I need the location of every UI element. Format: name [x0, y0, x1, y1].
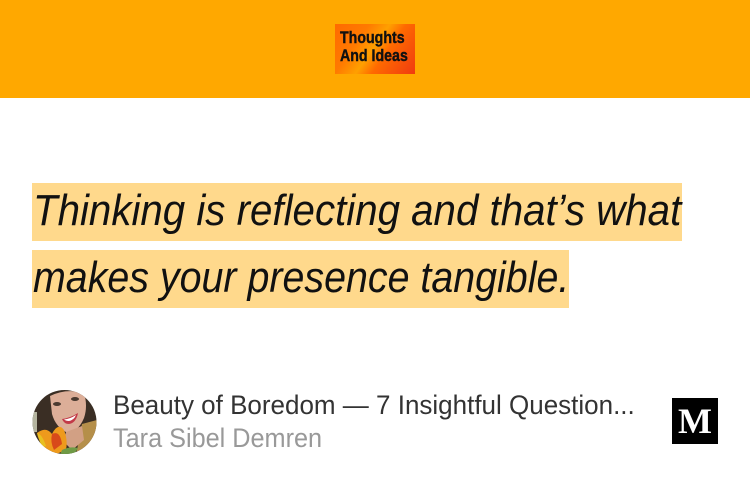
quote text line 1: Thinking is reflecting and that’s what [33, 186, 681, 235]
article title: Beauty of Boredom — 7 Insightful Question... [113, 390, 635, 420]
logo: Thoughts And Ideas [335, 24, 415, 74]
quote highlight line 2 [32, 250, 569, 308]
quote text line 2: makes your presence tangible. [33, 253, 569, 302]
header band [0, 0, 750, 98]
quote highlight line 1 [32, 183, 682, 241]
avatar [32, 390, 96, 454]
icon: Medium logo: M [678, 401, 712, 441]
author name: Tara Sibel Demren [113, 423, 322, 453]
logo: Thoughts And Ideas: And Ideas [340, 46, 408, 65]
quote [32, 183, 683, 308]
icon: Medium logo [672, 398, 718, 444]
logo: Thoughts And Ideas: Thoughts [340, 28, 405, 47]
